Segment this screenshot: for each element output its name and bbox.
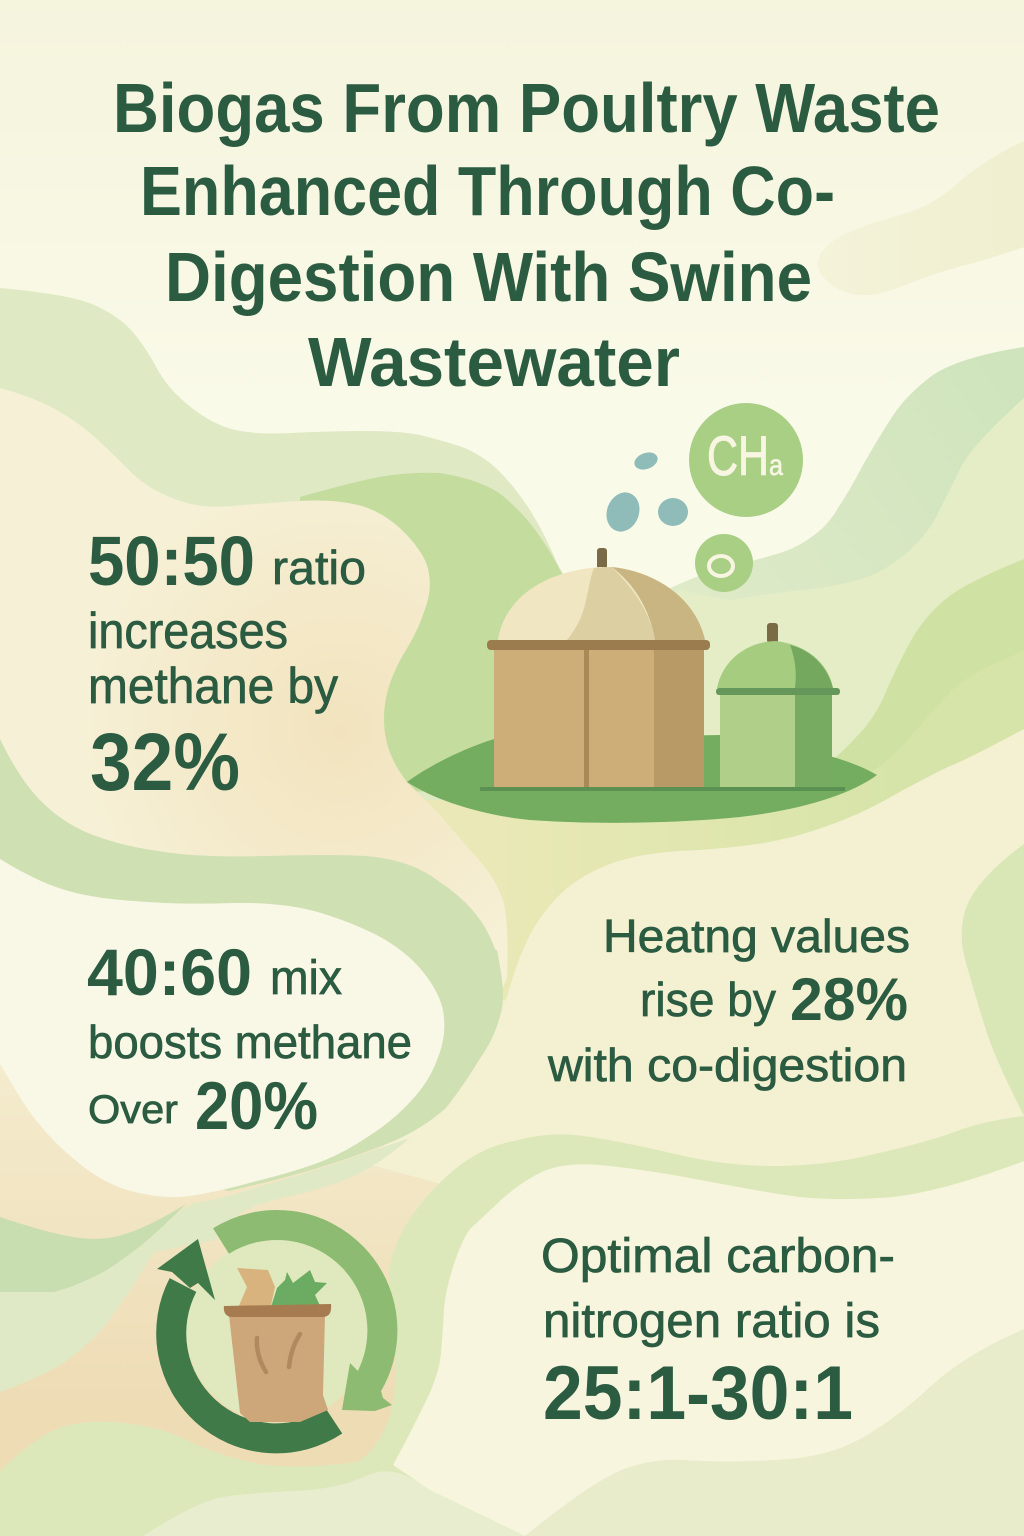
text block: 40:60 mix: boosts methane <box>88 1016 412 1068</box>
text block: 40:60 mix <box>87 935 412 1144</box>
text block: 50:50 ratio: increases <box>88 603 288 659</box>
text block: heating values <box>547 910 910 1091</box>
title: Wastewater <box>308 323 680 401</box>
icon: CH4 bubble: CH <box>707 424 769 487</box>
large digester <box>487 548 710 787</box>
icon: gas bubbles <box>601 449 688 536</box>
title: Biogas From Poultry Waste <box>113 69 940 147</box>
title: Enhanced Through Co- <box>140 152 835 230</box>
text block: 50:50 ratio: 50:50 <box>88 522 255 600</box>
text block: carbon-nitrogen ratio <box>541 1230 895 1436</box>
text block: carbon-nitrogen ratio: Optimal carbon- <box>541 1230 895 1283</box>
title <box>113 69 940 401</box>
text block: heating values: Heatng values <box>603 910 910 962</box>
text block: 50:50 ratio: methane by <box>88 658 338 714</box>
dark arrow <box>157 1239 334 1438</box>
small digester <box>716 623 840 787</box>
title: Digestion With Swine <box>165 238 812 316</box>
bin contents <box>237 1268 275 1310</box>
text block: 40:60 mix: 20% <box>195 1068 318 1144</box>
text block: heating values: 28% <box>790 966 908 1033</box>
ground <box>407 735 877 823</box>
icon: biogas digesters <box>407 548 877 823</box>
text block: 40:60 mix: Over <box>88 1088 178 1132</box>
text block: carbon-nitrogen ratio: 25:1-30:1 <box>543 1351 853 1436</box>
icon: CH4 bubble <box>689 403 803 517</box>
light arrow <box>221 1225 392 1411</box>
text block: heating values: rise by <box>640 973 776 1026</box>
text block: carbon-nitrogen ratio: nitrogen ratio is <box>543 1295 880 1348</box>
icon: CH4 bubble: a <box>769 449 783 482</box>
text block: 50:50 ratio <box>88 522 366 808</box>
icon: recycling waste bin <box>157 1225 392 1438</box>
text block: heating values: with co-digestion <box>547 1039 907 1091</box>
text block: 40:60 mix: mix <box>270 952 342 1005</box>
bin body <box>229 1315 328 1422</box>
icon: small bubble <box>695 534 753 592</box>
text block: 50:50 ratio: 32% <box>90 717 240 808</box>
text block: 50:50 ratio: ratio <box>272 541 366 594</box>
text block: 40:60 mix: 40:60 <box>87 935 252 1009</box>
